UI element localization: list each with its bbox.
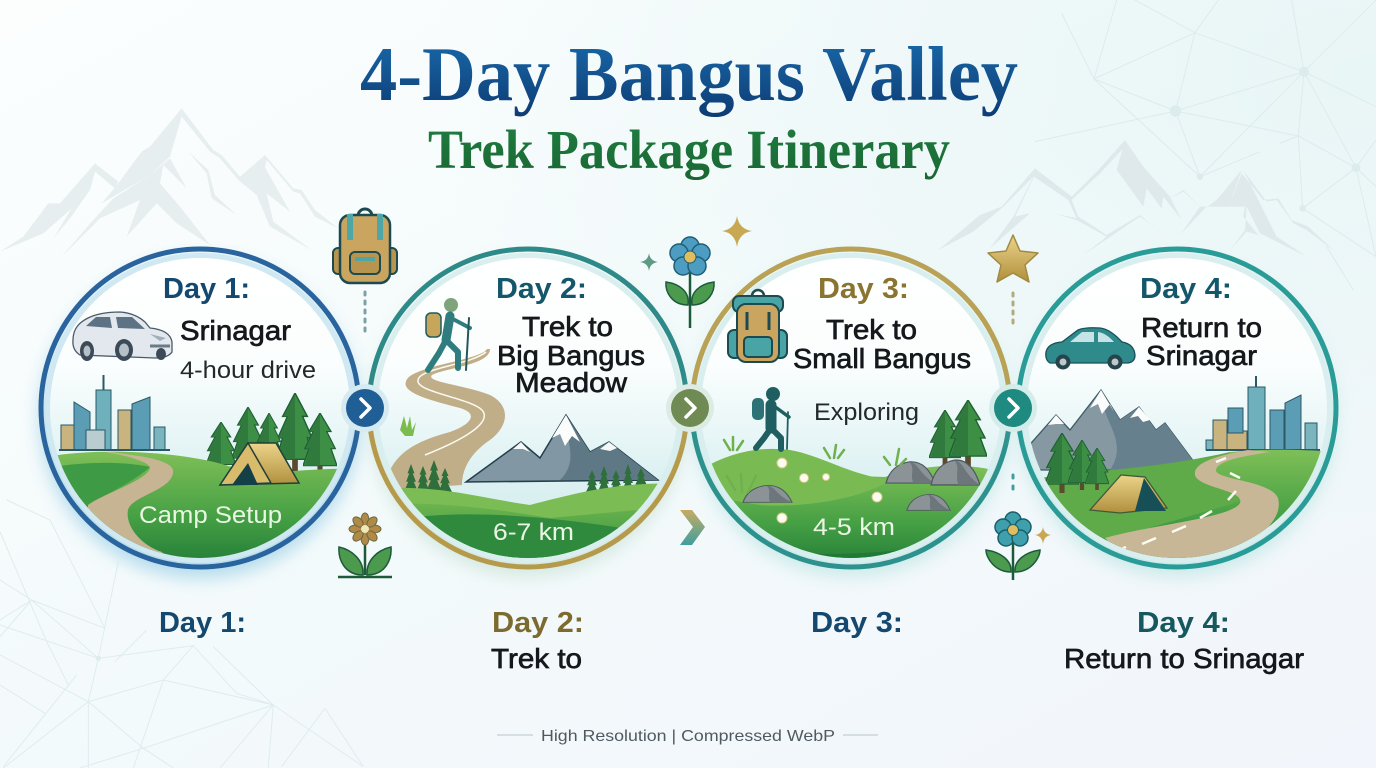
footer: High Resolution | Compressed WebP	[541, 728, 835, 745]
scene: tent	[220, 443, 299, 485]
text: Trek to Small Bangus: Trek to	[826, 314, 917, 345]
label: day 2: Trek to	[491, 643, 582, 674]
label: day 4: Return to Srinagar	[1064, 643, 1304, 674]
background network: bottom left	[0, 500, 363, 768]
background mountains: right	[938, 140, 1335, 257]
background mountains: left	[0, 108, 338, 258]
scene: city	[59, 375, 170, 450]
heading: Day 4:	[1140, 273, 1232, 305]
text: 4-5 km: 4-5 km	[813, 514, 895, 541]
arrow: small chevron	[680, 510, 705, 545]
scene: road	[1105, 450, 1279, 570]
label: day 4	[1064, 607, 1304, 674]
icon: backpack	[333, 209, 397, 283]
panel: day 2	[369, 249, 690, 576]
icon: hiker	[426, 298, 470, 370]
icon: star	[988, 235, 1038, 282]
text: Trek to Small Bangus	[793, 314, 971, 374]
scene: mountains	[1025, 390, 1200, 470]
text: Trek to Small Bangus: Small Bangus	[793, 343, 971, 374]
icon: car	[73, 312, 172, 361]
scene: ground	[1045, 450, 1321, 558]
scene: rocks	[743, 460, 980, 510]
panel: day 1	[40, 249, 365, 578]
scene: trees	[929, 400, 987, 466]
scene: ground	[58, 452, 338, 558]
label: day 4: Day 4:	[1137, 607, 1230, 639]
text: Exploring: Exploring	[814, 399, 919, 426]
heading: Day 2:	[496, 273, 587, 305]
panel: day 3	[692, 249, 1010, 576]
heading: Day 1:	[163, 273, 250, 305]
text: Return to Srinagar: Srinagar	[1146, 340, 1257, 371]
text: Trek to Big Bangus Meadow: Trek to	[522, 311, 613, 342]
scene: trees	[206, 393, 337, 475]
scene: road	[88, 452, 174, 554]
text: 4-hour drive: 4-hour drive	[180, 357, 316, 384]
background network: top right	[1035, 0, 1376, 290]
icon: backpack	[728, 290, 787, 362]
label: day 1: Day 1:	[159, 607, 246, 639]
scene: hills	[714, 466, 988, 558]
text: Trek to Big Bangus Meadow: Meadow	[515, 367, 628, 398]
text: 6-7 km: 6-7 km	[493, 519, 574, 546]
scene: mountain	[466, 415, 658, 482]
scene: tent	[1090, 475, 1167, 513]
icon: sparkle gold	[722, 216, 752, 247]
dots: upper right	[1012, 293, 1014, 325]
scene: trees	[1045, 433, 1109, 493]
scene: pine trees	[404, 460, 649, 494]
connector arrow: day 1 to 2	[341, 384, 389, 432]
scene: grass	[724, 437, 906, 492]
subtitle: Trek Package Itinerary	[428, 119, 950, 180]
connector arrow: day 2 to 3	[666, 384, 714, 432]
icon: blue flower	[666, 237, 714, 328]
scene: city	[1206, 376, 1320, 450]
panel: day 4	[1018, 249, 1340, 576]
title: 4-Day Bangus Valley	[360, 31, 1018, 117]
text: Return to Srinagar	[1141, 312, 1262, 371]
label: day 3: Day 3:	[811, 607, 903, 639]
label: day 2	[491, 607, 584, 674]
icon: sparkle small	[1035, 527, 1051, 544]
text: Camp Setup: Camp Setup	[139, 502, 282, 529]
icon: hiker	[752, 387, 789, 449]
scene: flowers	[777, 458, 882, 523]
scene: hills	[401, 484, 658, 558]
heading: Day 3:	[818, 273, 909, 305]
icon: car	[1046, 328, 1135, 370]
label: day 2: Day 2:	[492, 607, 584, 639]
icon: teal flower	[986, 512, 1040, 580]
icon: sparkle teal	[640, 253, 658, 271]
connector arrow: day 3 to 4	[989, 384, 1037, 432]
text: Trek to Big Bangus Meadow	[497, 311, 645, 398]
dots: upper left	[364, 292, 366, 334]
scene: road	[388, 349, 505, 490]
text: Srinagar: Srinagar	[180, 315, 291, 346]
icon: tan flower	[338, 513, 392, 577]
dots: lower right	[1012, 475, 1014, 497]
text: Trek to Big Bangus Meadow: Big Bangus	[497, 340, 645, 371]
text: Return to Srinagar: Return to	[1141, 312, 1262, 343]
